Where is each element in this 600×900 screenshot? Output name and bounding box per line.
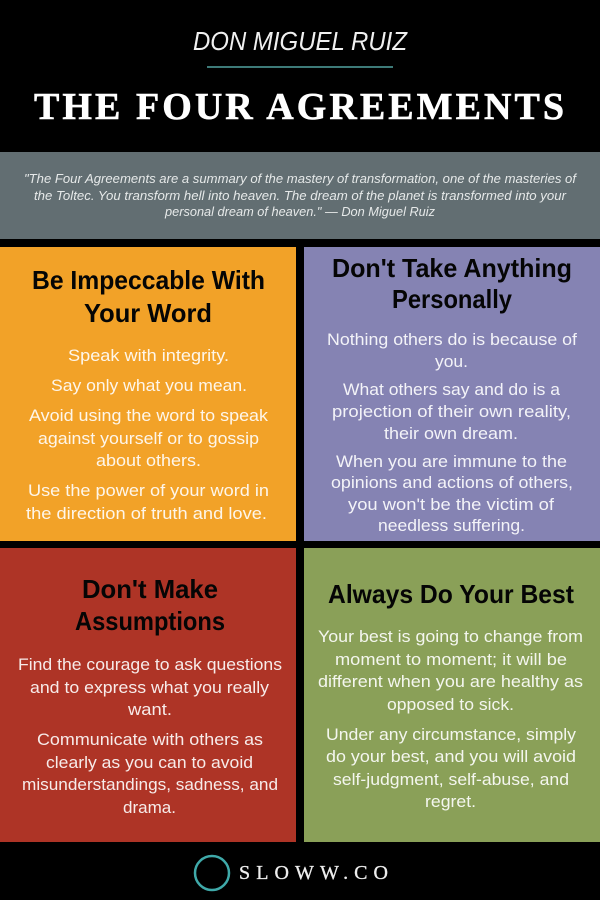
body text: be impeccable — [26, 346, 269, 523]
body text: don't make assumptions: want. — [127, 700, 172, 719]
heading: be impeccable: Your Word — [84, 298, 212, 328]
body text: always do your best: regret. — [425, 792, 476, 811]
teal divider under author — [207, 66, 393, 68]
body text: be impeccable: Use the power of your word in — [28, 481, 269, 500]
body text: always do your best: opposed to sick. — [387, 695, 514, 714]
body text: don't take anything personally: projection of their own reality, — [332, 402, 571, 421]
body text: don't take anything personally — [327, 330, 577, 535]
panel: quote — [0, 152, 600, 239]
body text: be impeccable: Say only what you mean. — [51, 376, 247, 395]
panel: always do your best — [304, 548, 600, 842]
body text: don't make assumptions: Communicate with others as — [37, 730, 263, 749]
heading: don't take anything personally: Personally — [392, 284, 512, 314]
body text: don't take anything personally: What others say and do is a — [343, 380, 561, 399]
heading: don't take anything personally — [332, 253, 572, 314]
body text: don't take anything personally: their own dream. — [384, 424, 518, 443]
body text: be impeccable: against yourself or to gossip — [38, 429, 259, 448]
body text: always do your best: do your best, and you will avoid — [326, 747, 576, 766]
panel: be impeccable with your word — [0, 247, 296, 541]
heading: don't take anything personally: Don't Take Anything — [332, 253, 572, 283]
body text: don't take anything personally: Nothing others do is because of — [327, 330, 577, 349]
panel: quote: the Toltec. You transform hell into heaven. The dream of the planet is transformed into your — [34, 189, 567, 203]
icon: teal ring — [195, 856, 229, 890]
body text: be impeccable: Speak with integrity. — [68, 346, 229, 365]
body text: don't make assumptions — [18, 655, 282, 817]
body text: don't take anything personally: you. — [435, 352, 468, 371]
panel: don't take anything personally — [304, 247, 600, 541]
body text: always do your best: different when you are healthy as — [318, 672, 583, 691]
heading: be impeccable — [32, 265, 265, 328]
panel: don't make assumptions — [0, 548, 296, 842]
body text: don't take anything personally: you won't be the victim of — [348, 495, 554, 514]
body text: don't make assumptions: clearly as you can to avoid — [46, 753, 253, 772]
footer logo — [195, 856, 388, 890]
heading: be impeccable: Be Impeccable With — [32, 265, 265, 295]
body text: don't make assumptions: Find the courage to ask questions — [18, 655, 282, 674]
body text: don't take anything personally: needless suffering. — [378, 516, 525, 535]
panel: quote: "The Four Agreements are a summary of the mastery of transformation, one of the masteries of — [24, 172, 578, 186]
heading: always do your best: Always Do Your Best — [328, 579, 574, 609]
heading: don't make assumptions — [75, 574, 225, 636]
body text: don't take anything personally: opinions and actions of others, — [331, 473, 573, 492]
body text: always do your best: Under any circumstance, simply — [326, 725, 577, 744]
author name: DON MIGUEL RUIZ — [193, 26, 408, 56]
body text: don't make assumptions: drama. — [123, 798, 176, 817]
heading: don't make assumptions: Assumptions — [75, 606, 225, 636]
body text: always do your best: self-judgment, self-abuse, and — [333, 770, 569, 789]
body text: be impeccable: about others. — [96, 451, 201, 470]
body text: don't make assumptions: and to express what you really — [30, 678, 270, 697]
heading: don't make assumptions: Don't Make — [82, 574, 218, 604]
brand name: SLOWW.CO — [239, 862, 388, 884]
title: THE FOUR AGREEMENTS — [34, 86, 564, 128]
body text: don't take anything personally: When you are immune to the — [336, 452, 567, 471]
body text: be impeccable: Avoid using the word to speak — [29, 406, 269, 425]
panel: quote: personal dream of heaven." — Don Miguel Ruiz — [164, 205, 436, 219]
body text: always do your best: moment to moment; it will be — [335, 650, 567, 669]
body text: be impeccable: the direction of truth and love. — [26, 504, 267, 523]
body text: always do your best: Your best is going to change from — [318, 627, 583, 646]
body text: always do your best — [318, 627, 583, 811]
body text: don't make assumptions: misunderstandings, sadness, and — [22, 775, 278, 794]
